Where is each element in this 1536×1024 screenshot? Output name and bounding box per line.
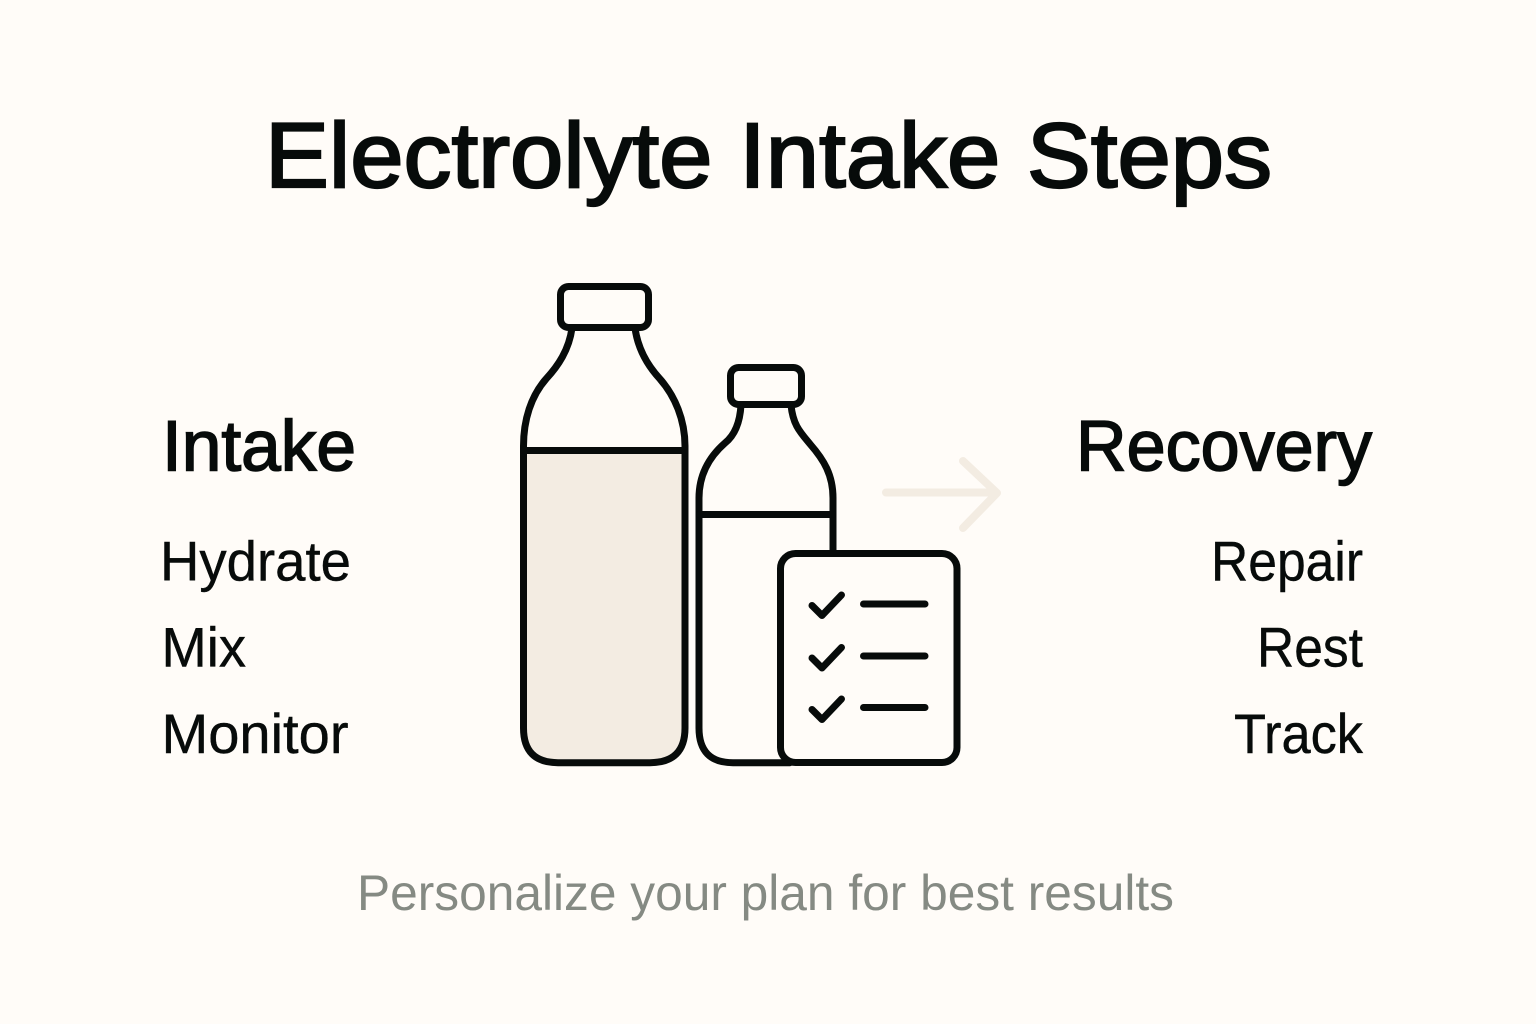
- list item: mix: Mix: [162, 616, 246, 678]
- title: Electrolyte Intake Steps: [265, 105, 1272, 207]
- checklist card: [780, 554, 957, 762]
- small bottle liquid line: [699, 511, 833, 518]
- large bottle liquid fill: [524, 451, 685, 763]
- panel: recovery column: [1076, 408, 1372, 765]
- heading: intake: Intake: [162, 408, 356, 486]
- icon: checklist: [780, 554, 957, 762]
- large bottle liquid line: [524, 447, 685, 454]
- checklist row 1: [812, 595, 925, 616]
- icon: large bottle: [524, 286, 685, 763]
- large bottle outline: [524, 328, 685, 763]
- checklist row 2: [812, 648, 925, 668]
- large bottle cap: [560, 286, 648, 328]
- list item: hydrate: Hydrate: [160, 530, 351, 592]
- arrow: intake to recovery: [886, 461, 997, 528]
- checklist row 3: [812, 699, 925, 720]
- list item: repair: Repair: [1211, 530, 1363, 592]
- heading: recovery: Recovery: [1076, 408, 1372, 486]
- small bottle outline: [699, 405, 833, 763]
- small bottle cap: [730, 368, 802, 404]
- panel: intake column: [160, 408, 356, 765]
- list item: monitor: Monitor: [162, 702, 348, 765]
- icon: small bottle: [699, 368, 833, 763]
- footer note: Personalize your plan for best results: [357, 865, 1174, 921]
- list item: rest: Rest: [1257, 616, 1363, 678]
- list item: track: Track: [1234, 702, 1364, 765]
